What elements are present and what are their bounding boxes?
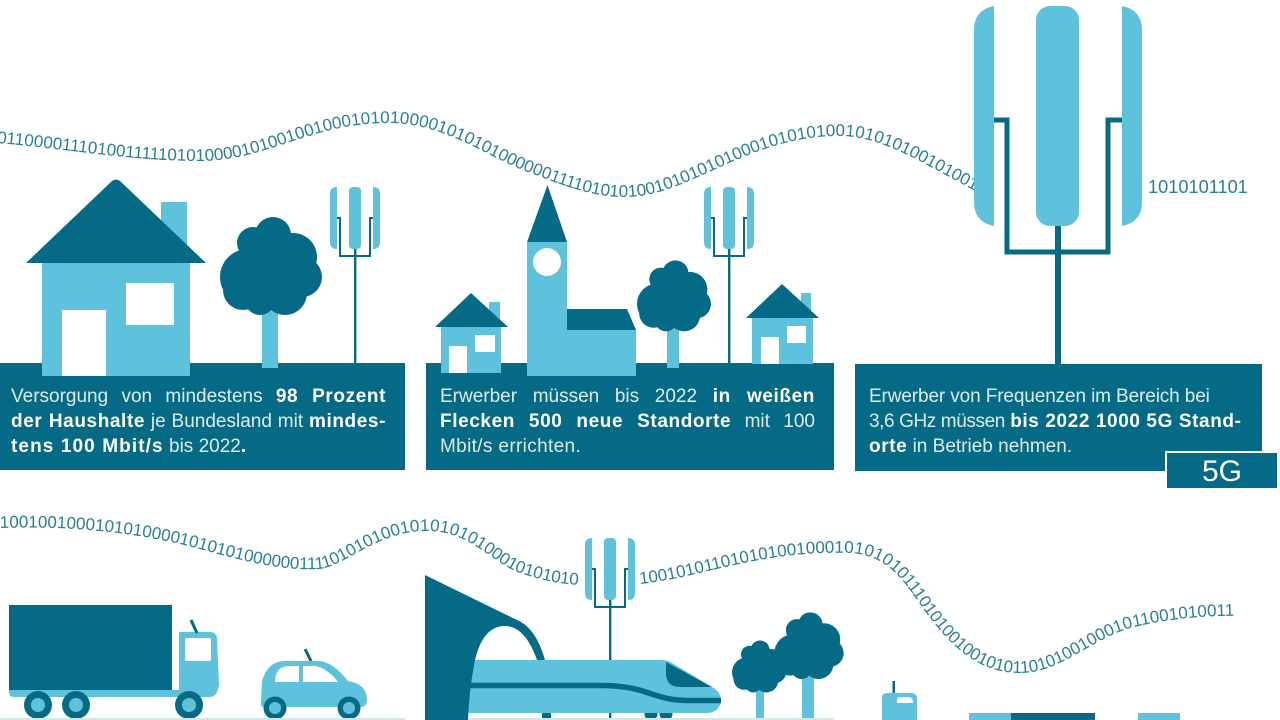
binary stream bottom left [1, 516, 578, 585]
binary stream bottom right: 1001010110101010010001010101011101010010010101101010010001011001010011 [640, 540, 1234, 674]
icon: train [450, 660, 721, 720]
panel: 5G sites: 3,6 GHz müssen bis 2022 1000 5G Stand- [869, 411, 1242, 432]
icon: car [261, 649, 367, 720]
panel: household coverage: der Haushalte je Bundesland mit mindes- [11, 411, 386, 432]
icon: building tops [969, 713, 1180, 720]
icon: large 5G antenna [974, 6, 1142, 364]
badge: 5G [1165, 451, 1277, 488]
panel: 5G sites [855, 364, 1262, 471]
icon: small antenna 1 [330, 187, 380, 363]
icon: trees by the track [732, 612, 844, 720]
icon: village tree [637, 260, 711, 368]
badge: 5G: 5G [1202, 455, 1242, 488]
binary stream top: 01100001110100111110101000010100100100010101000010101010000001111010101001010101010001010101001010101001010010 [0, 111, 974, 198]
icon: tunnel [425, 575, 551, 720]
icon: large house [26, 180, 206, 376]
panel: 5G sites: Erwerber von Frequenzen im Bereich bei [869, 386, 1210, 407]
binary stream top: 1010101101 [1148, 177, 1248, 197]
icon: small antenna 2 [704, 187, 754, 363]
icon: church [527, 185, 636, 376]
panel: household coverage [0, 363, 405, 470]
panel: 5G sites: orte in Betrieb nehmen. [869, 436, 1072, 457]
icon: village house left [435, 293, 508, 373]
panel: white spots: Erwerber müssen bis 2022 in weißen [440, 386, 815, 407]
panel: white spots [426, 363, 834, 470]
icon: village house right [746, 284, 819, 364]
panel: white spots: Flecken 500 neue Standorte mit 100 [440, 411, 815, 432]
icon: mobile phone [882, 681, 917, 720]
panel: household coverage: Versorgung von mindestens 98 Prozent [11, 386, 386, 407]
panel: household coverage: tens 100 Mbit/s bis 2022. [11, 436, 247, 457]
icon: antenna at train [585, 538, 635, 720]
ground line [468, 718, 834, 720]
panel: white spots: Mbit/s errichten. [440, 436, 581, 457]
ground line [0, 718, 405, 720]
icon: tree [220, 217, 322, 368]
icon: truck [9, 605, 219, 719]
